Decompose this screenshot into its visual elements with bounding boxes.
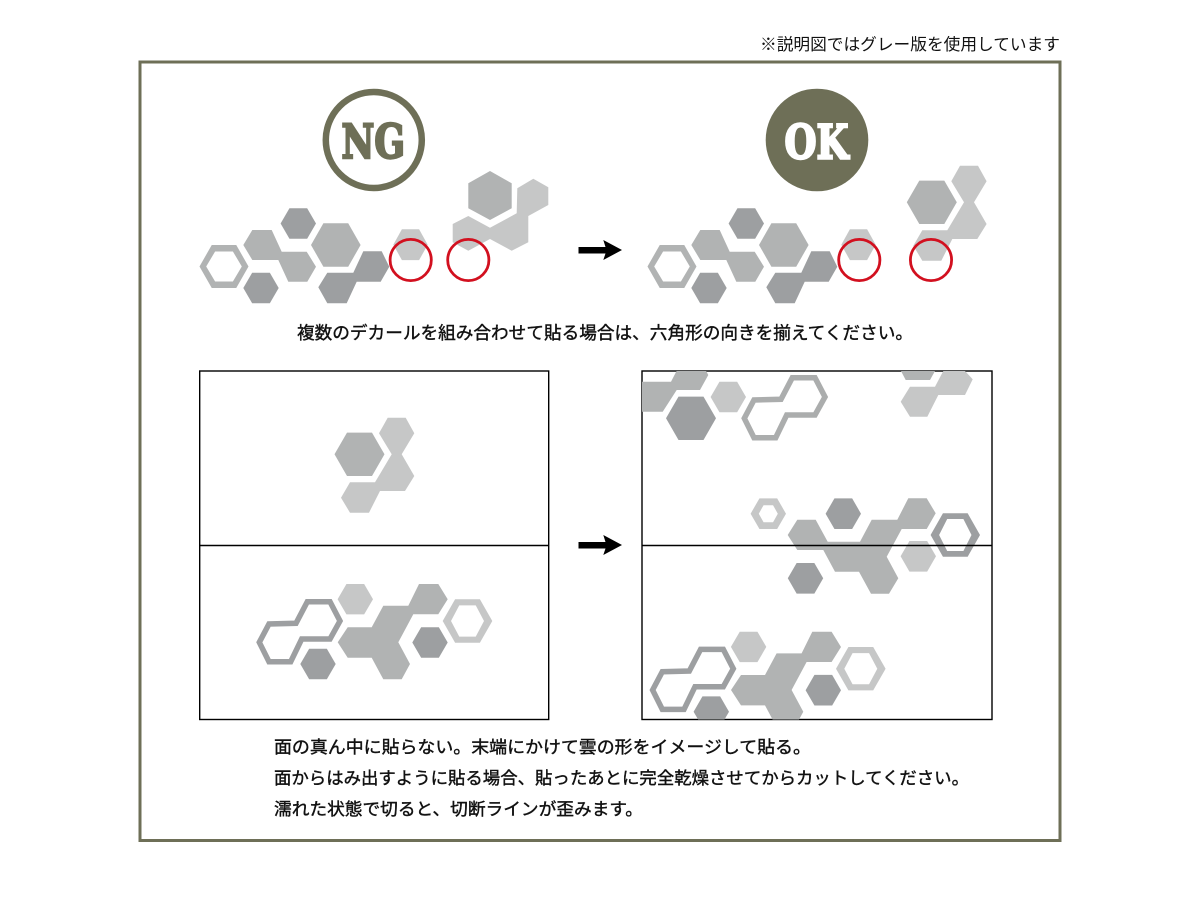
arrow: placement NG to OK [578, 535, 622, 555]
NG misaligned hexagon decal [453, 171, 548, 251]
upper-left decals [642, 371, 825, 440]
OK aligned hexagon decal [907, 166, 987, 261]
OK red circles [839, 239, 952, 281]
upper decal [334, 418, 414, 513]
middle decal cluster [751, 498, 980, 594]
NG hexagon cluster [200, 208, 428, 303]
OK hexagon cluster [648, 208, 876, 303]
OK badge: OK [784, 116, 850, 170]
panel: OK placement on car body [642, 371, 992, 727]
note: grey version used in diagrams: ※説明図ではグレー版を使用しています [760, 35, 1060, 54]
NG badge [326, 92, 422, 188]
upper-right decals [901, 371, 973, 417]
instructions text block [274, 737, 969, 819]
outer frame [140, 62, 1060, 840]
caption: align hexagon direction: 複数のデカールを組み合わせて貼る場合は、六角形の向きを揃えてください。 [297, 323, 913, 343]
instructions text block: 面からはみ出すように貼る場合、貼ったあとに完全乾燥させてからカットしてください。 [274, 768, 969, 788]
instructions text block: 面の真ん中に貼らない。末端にかけて雲の形をイメージして貼る。 [274, 737, 811, 757]
lower decal cluster [259, 584, 492, 679]
lower-left decal cluster [653, 632, 886, 727]
instructions text block: 濡れた状態で切ると、切断ラインが歪みます。 [274, 799, 643, 819]
panel: NG placement on car body [200, 371, 549, 720]
OK badge [766, 89, 868, 191]
NG badge: NG [342, 115, 405, 170]
NG red circles [390, 239, 489, 281]
arrow: NG to OK [578, 240, 622, 260]
